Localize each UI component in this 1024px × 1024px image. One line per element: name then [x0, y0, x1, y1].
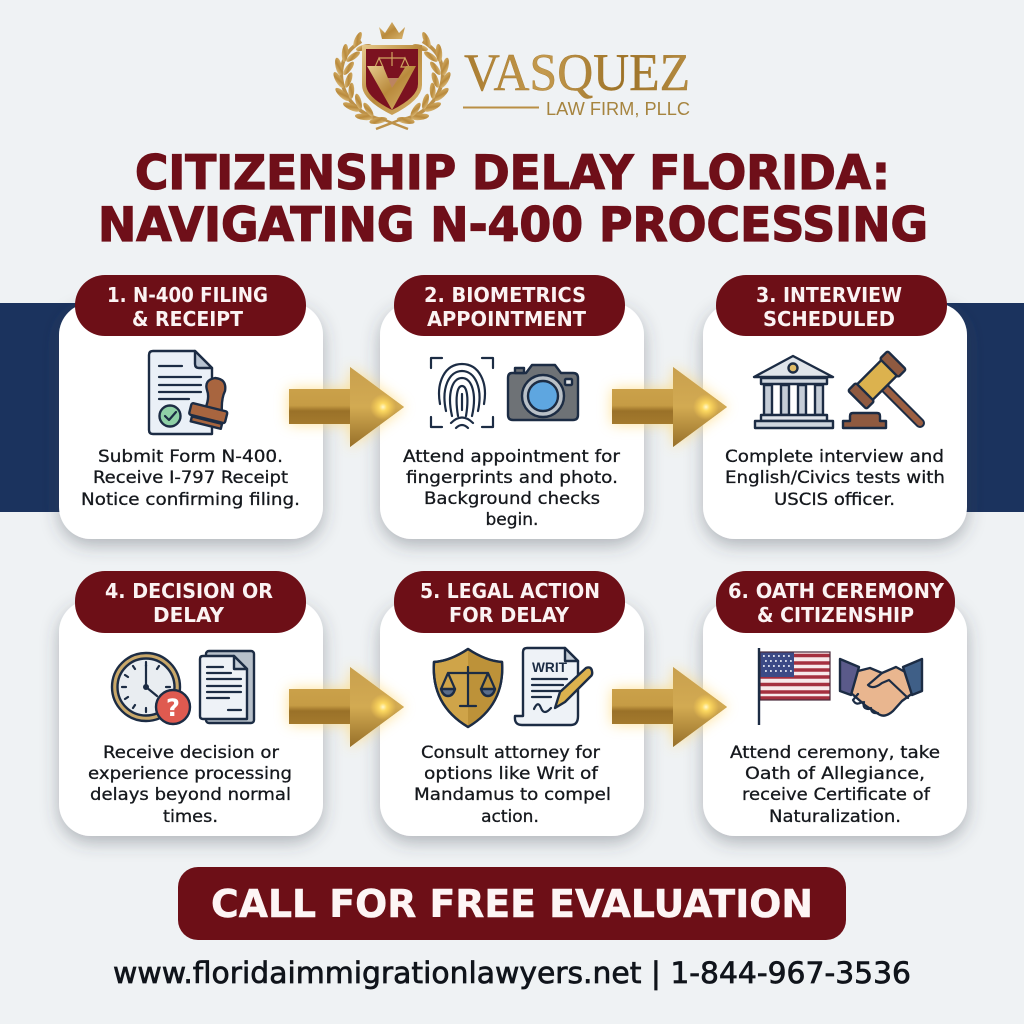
arrow 4 to 5: [289, 667, 404, 747]
title: [98, 146, 928, 253]
call to action: [178, 867, 846, 940]
step 5 text: action.: [481, 807, 539, 827]
icon: handshake: [840, 659, 922, 716]
logo subtitle: LAW FIRM, PLLC: [546, 99, 690, 119]
icon: laurel right: [396, 31, 453, 125]
heading pill 5: 5. LEGAL ACTION: [420, 579, 600, 603]
panel: step 2: [380, 275, 644, 539]
step 3 text: English/Civics tests with: [725, 468, 945, 488]
heading pill 5: FOR DELAY: [449, 603, 569, 627]
title: CITIZENSHIP DELAY FLORIDA:: [135, 146, 890, 201]
title: NAVIGATING N-400 PROCESSING: [98, 198, 928, 253]
step 2 text: begin.: [486, 510, 538, 530]
step 4 text: experience processing: [88, 764, 292, 784]
step 5 text: Consult attorney for: [421, 743, 600, 763]
icon: american flag: [759, 648, 830, 725]
icon: shield: [362, 45, 422, 115]
icon: writ and pen: [515, 648, 592, 725]
step 3 text: [725, 447, 945, 510]
heading pill 6: & CITIZENSHIP: [757, 603, 914, 627]
step 5 text: [414, 743, 611, 827]
heading pill 4: DELAY: [153, 603, 225, 627]
heading pill 3: [716, 275, 947, 336]
heading pill 2: 2. BIOMETRICS: [424, 283, 586, 307]
step 2 text: Background checks: [424, 489, 600, 509]
icon: document and stamp: [149, 351, 228, 434]
step 3 text: Complete interview and: [725, 447, 944, 467]
panel: step 1: [59, 275, 323, 539]
panel: step 4: [59, 571, 323, 836]
icon: gavel: [843, 351, 920, 428]
step 4 text: times.: [163, 807, 218, 827]
icon: question badge: [156, 690, 190, 724]
website and phone: www.floridaimmigrationlawyers.net | 1-844-967-3536: [113, 956, 911, 990]
heading pill 3: SCHEDULED: [763, 307, 895, 331]
heading pill 1: [75, 275, 306, 336]
arrow 5 to 6: [612, 667, 727, 747]
logo line: [463, 106, 539, 108]
icon: courthouse: [754, 356, 833, 428]
step 4 text: Receive decision or: [103, 743, 279, 763]
step 5 text: Mandamus to compel: [414, 785, 611, 805]
heading pill 2: [394, 275, 625, 336]
navy band left: [0, 303, 80, 512]
step 2 text: Attend appointment for: [403, 447, 620, 467]
step 1 text: Notice confirming filing.: [81, 490, 300, 510]
step 1 text: Submit Form N-400.: [98, 447, 283, 467]
icon: laurel knot: [376, 119, 408, 129]
step 2 text: [403, 447, 620, 530]
heading pill 5: [394, 571, 625, 633]
heading pill 1: 1. N-400 FILING: [107, 283, 268, 307]
step 2 text: fingerprints and photo.: [406, 468, 618, 488]
heading pill 1: & RECEIPT: [132, 307, 243, 331]
panel: step 6: [703, 571, 967, 836]
panel: step 5: [380, 571, 644, 836]
icon: laurel left: [331, 31, 388, 125]
icon: question badge: ?: [166, 694, 180, 722]
arrow 1 to 2: [289, 367, 404, 447]
logo: [331, 22, 690, 129]
heading pill 3: 3. INTERVIEW: [756, 283, 902, 307]
heading pill 4: 4. DECISION OR: [105, 579, 273, 603]
step 6 text: Oath of Allegiance,: [745, 764, 925, 784]
step 5 text: options like Writ of: [424, 764, 599, 784]
step 4 text: [88, 743, 292, 827]
panel: step 3: [703, 275, 967, 539]
icon: fingerprint: [431, 358, 493, 428]
step 1 text: [81, 447, 300, 510]
arrow 2 to 3: [612, 367, 727, 447]
step 4 text: delays beyond normal: [90, 785, 291, 805]
icon: crown: [379, 22, 405, 39]
step 6 text: Naturalization.: [769, 807, 901, 827]
icon: camera: [508, 365, 578, 420]
navy band right: [944, 303, 1024, 512]
step 1 text: Receive I-797 Receipt: [93, 468, 288, 488]
heading pill 6: 6. OATH CEREMONY: [728, 579, 944, 603]
logo wordmark: VASQUEZ: [464, 44, 690, 102]
step 3 text: USCIS officer.: [774, 490, 895, 510]
icon: writ and pen: WRIT: [532, 659, 567, 675]
heading pill 2: APPOINTMENT: [427, 307, 586, 331]
call to action: CALL FOR FREE EVALUATION: [211, 882, 813, 926]
icon: documents: [200, 651, 254, 723]
heading pill 4: [75, 571, 306, 633]
step 6 text: [730, 743, 940, 827]
step 6 text: Attend ceremony, take: [730, 743, 940, 763]
icon: clock: [112, 653, 180, 721]
heading pill 6: [716, 571, 955, 633]
step 6 text: receive Certificate of: [742, 785, 931, 805]
icon: shield with scales: [434, 649, 502, 727]
